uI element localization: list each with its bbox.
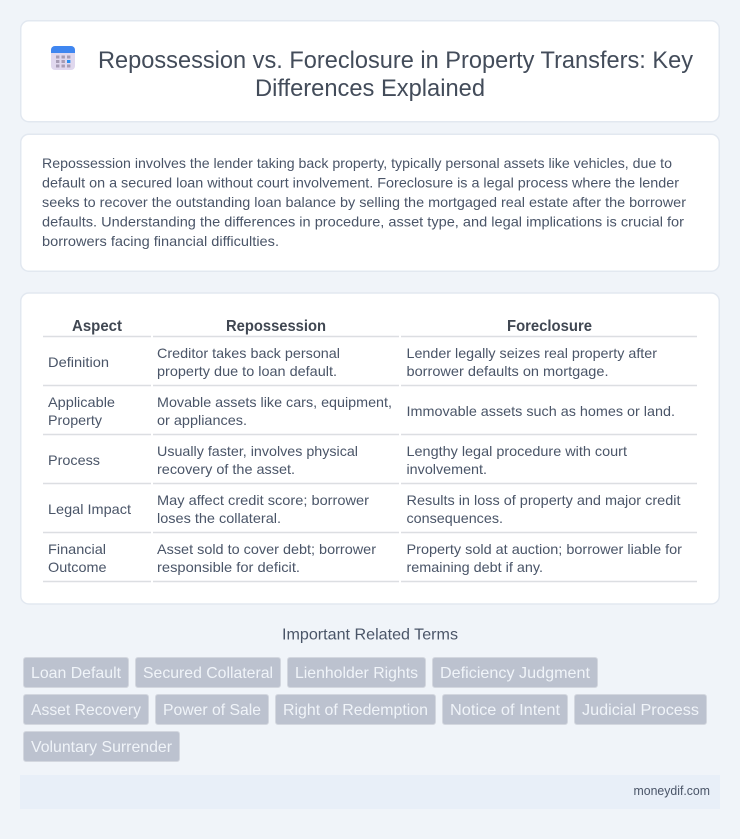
tag: deficiency judgment: Deficiency Judgment (440, 665, 591, 682)
tag: right of redemption (276, 694, 436, 724)
tag: loan default: Loan Default (31, 665, 122, 682)
title (98, 47, 693, 102)
row: process: recovery of the asset. (157, 461, 295, 477)
title: Differences Explained (255, 75, 485, 102)
row: applicable property: Applicable (48, 394, 115, 410)
row: legal impact: consequences. (406, 510, 503, 526)
row: financial outcome: Property sold at auction; borrower liable for (406, 541, 682, 557)
row: financial outcome: remaining debt if any. (406, 559, 543, 575)
footer: moneydif.com (634, 784, 710, 798)
panel: introduction (21, 134, 719, 271)
tag: asset recovery: Asset Recovery (31, 702, 141, 719)
tag: secured collateral: Secured Collateral (143, 665, 273, 682)
text block: introduction: defaults. Understanding the differences in procedure, asset type, and legal implications is crucial for (42, 214, 684, 230)
row: definition: Definition (48, 354, 109, 370)
tag: loan default (24, 658, 128, 688)
row: financial outcome: Asset sold to cover debt; borrower (157, 541, 376, 557)
row: financial outcome (43, 541, 697, 582)
tag: asset recovery (24, 694, 148, 724)
tag: power of sale (156, 694, 268, 724)
panel: header (21, 21, 719, 122)
text block: introduction: Repossession involves the lender taking back property, typically personal assets like vehicles, due to (42, 155, 672, 171)
tag: voluntary surrender (24, 732, 180, 762)
tag: secured collateral (136, 658, 280, 688)
heading: important related terms: Important Related Terms (282, 626, 458, 644)
title: Repossession vs. Foreclosure in Property Transfers: Key (98, 47, 693, 74)
table header: Aspect (72, 318, 123, 335)
tag: lienholder rights: Lienholder Rights (295, 665, 418, 682)
row: process: Usually faster, involves physical (157, 443, 358, 459)
tag: deficiency judgment (432, 658, 598, 688)
row: financial outcome: Outcome (48, 559, 107, 575)
related term tags (24, 658, 706, 762)
row: process: Process (48, 452, 100, 468)
text block: introduction (42, 155, 686, 249)
row: definition: Lender legally seizes real property after (406, 345, 657, 361)
tag: notice of intent: Notice of Intent (450, 702, 561, 719)
row: definition (43, 345, 697, 386)
row: definition: borrower defaults on mortgage. (406, 363, 608, 379)
table header: Repossession (226, 318, 326, 335)
row: legal impact: Results in loss of property and major credit (406, 492, 681, 508)
text block: introduction: borrowers facing financial difficulties. (42, 233, 279, 249)
row: legal impact: May affect credit score; borrower (157, 492, 369, 508)
row: definition: Creditor takes back personal (157, 345, 340, 361)
tag: notice of intent (442, 694, 568, 724)
row: process: involvement. (406, 461, 487, 477)
row: legal impact: loses the collateral. (157, 510, 281, 526)
row: applicable property: Movable assets like cars, equipment, (157, 394, 392, 410)
row: financial outcome: responsible for deficit. (157, 559, 300, 575)
tag: right of redemption: Right of Redemption (283, 702, 428, 719)
table header (43, 318, 697, 336)
row: process (43, 443, 697, 484)
row: financial outcome: Financial (48, 541, 106, 557)
icon: calendar (51, 46, 75, 70)
tag: lienholder rights (288, 658, 426, 688)
text block: introduction: seeks to recover the outstanding loan balance by selling the mortgaged real estate after the borrower (42, 194, 686, 210)
row: legal impact (43, 492, 697, 532)
footer (20, 775, 720, 809)
tag: judicial process: Judicial Process (582, 702, 699, 719)
table header: Foreclosure (507, 318, 592, 335)
row: applicable property: Property (48, 412, 102, 428)
panel: comparison table (21, 293, 719, 604)
row: definition: property due to loan default. (157, 363, 337, 379)
tag: power of sale: Power of Sale (163, 702, 261, 719)
row: applicable property (43, 394, 697, 434)
text block: introduction: default on a secured loan without court involvement. Foreclosure is a legal process where the lender (42, 174, 679, 190)
row: applicable property: or appliances. (157, 412, 247, 428)
row: applicable property: Immovable assets such as homes or land. (406, 403, 675, 419)
tag: voluntary surrender: Voluntary Surrender (31, 739, 173, 756)
row: process: Lengthy legal procedure with court (406, 443, 627, 459)
row: legal impact: Legal Impact (48, 501, 131, 517)
tag: judicial process (574, 694, 706, 724)
